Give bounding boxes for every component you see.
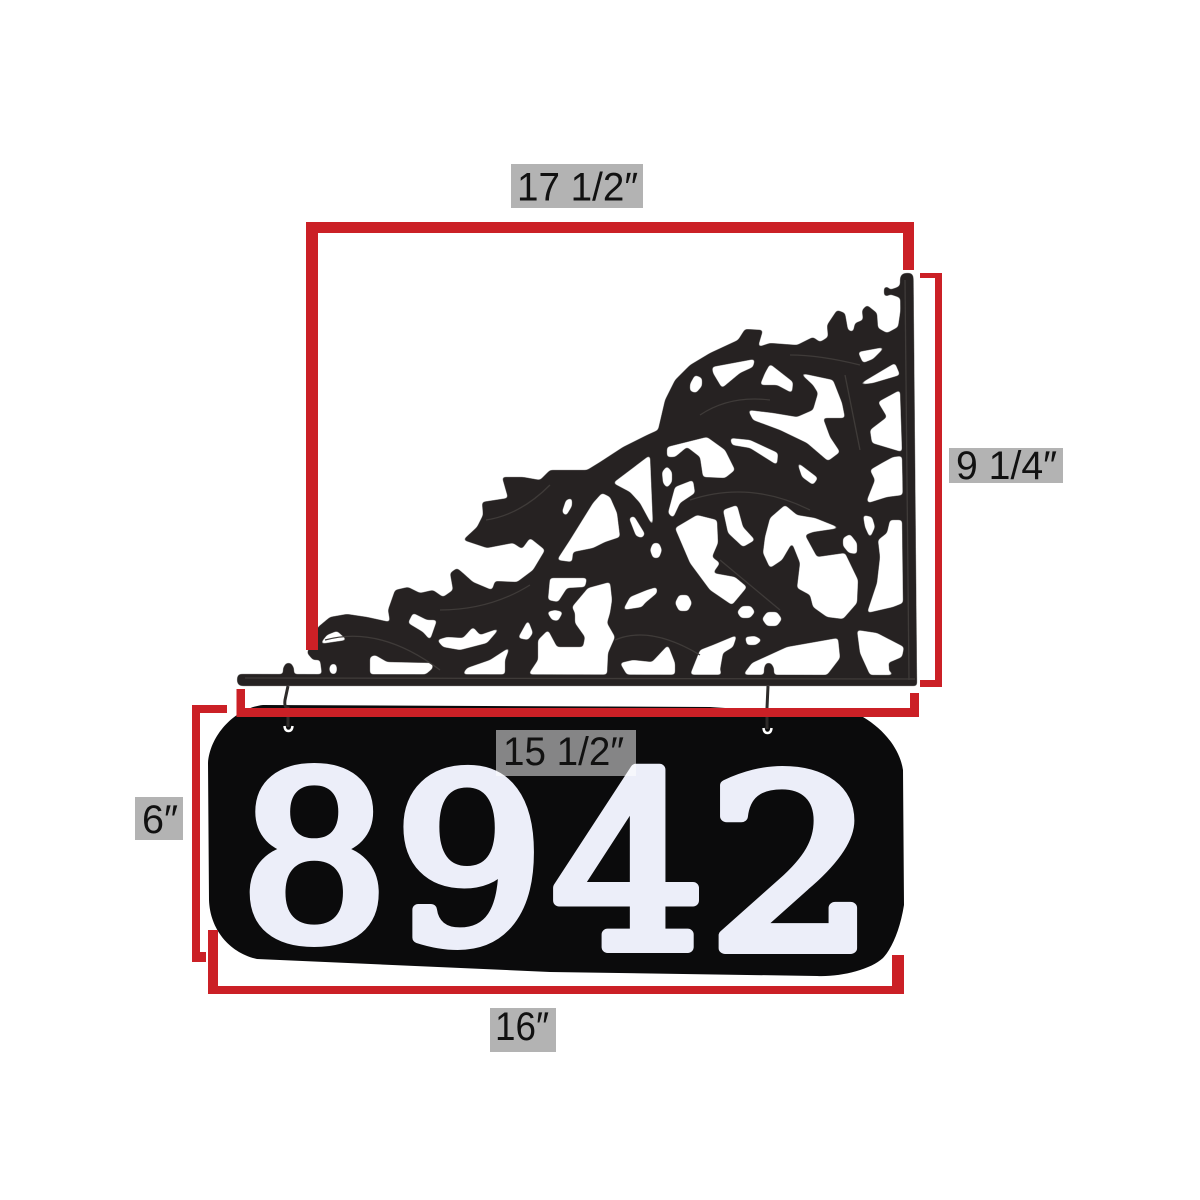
cast iron oak leaf bracket <box>237 273 917 686</box>
leaf vein highlights <box>245 280 915 680</box>
left mounting hole <box>284 726 292 731</box>
right mounting hole <box>764 728 772 733</box>
digit 8: 8 <box>240 728 389 992</box>
dimension bracket: bracket width <box>306 222 914 650</box>
dimension bracket: sign height <box>192 705 227 962</box>
sign panel with house number <box>208 705 904 1005</box>
label: 16 inches: 16″ <box>495 1005 549 1049</box>
dimension bracket: bracket height <box>920 273 942 687</box>
label: 6 inches: 6″ <box>142 798 178 842</box>
label: 17 1/2 inches: 17 1/2″ <box>517 166 638 210</box>
digit 9: 9 <box>394 728 544 995</box>
label: 15 1/2 inches: 15 1/2″ <box>503 730 624 774</box>
bracket silhouette <box>237 273 917 686</box>
black sign plate <box>208 705 904 976</box>
digit 4: 4 <box>552 725 705 1004</box>
label: 9 1/4 inches: 9 1/4″ <box>956 444 1057 488</box>
dimension bracket: hole spacing <box>236 689 919 717</box>
dimension bracket: sign width <box>208 930 904 994</box>
digit 2: 2 <box>707 729 877 1005</box>
hanging hooks <box>285 686 768 729</box>
